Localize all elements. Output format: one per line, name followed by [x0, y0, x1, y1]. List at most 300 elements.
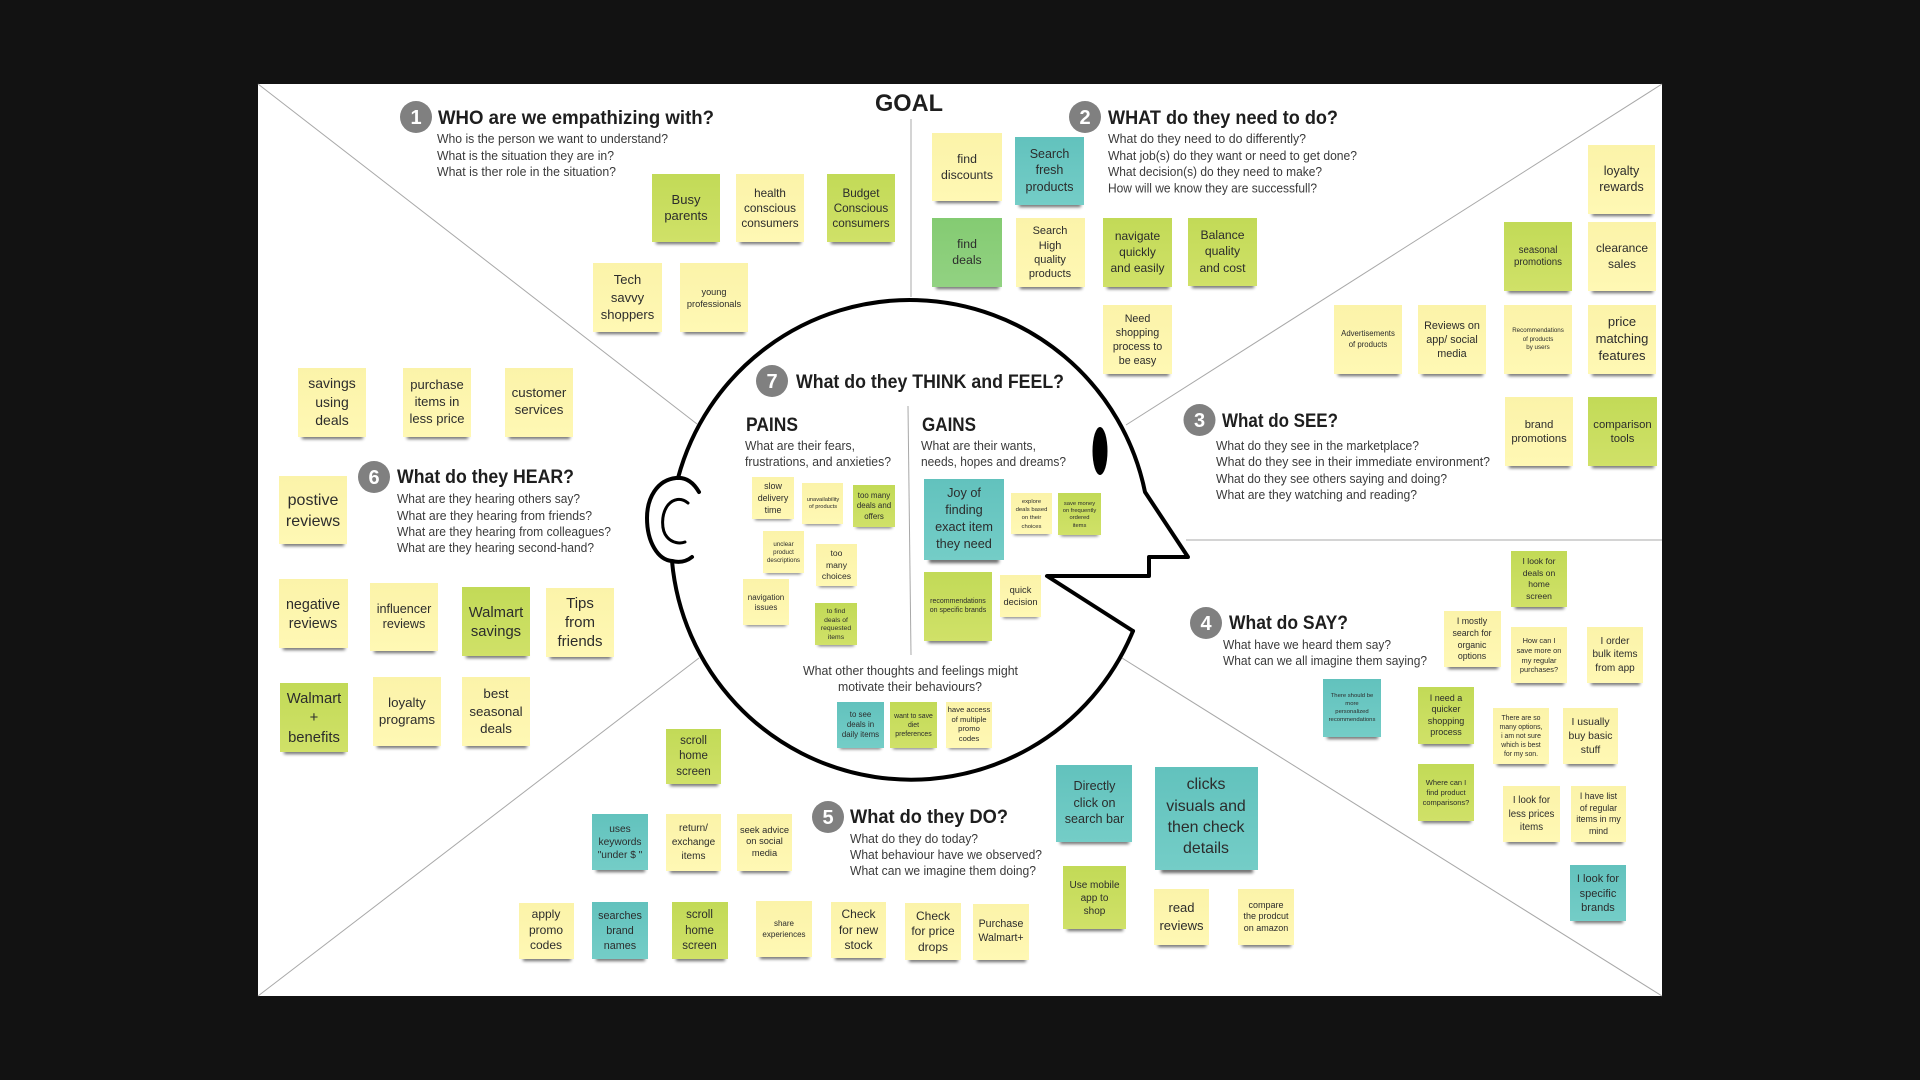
sticky: loyalty rewards	[1588, 145, 1655, 216]
sticky: Walmart + benefits	[280, 683, 348, 754]
sticky: to find deals of requested items: items	[828, 634, 845, 641]
sticky: clicks visuals and then check details	[1155, 767, 1258, 873]
sticky: I have list of regular items in my mind: I have list	[1580, 791, 1618, 801]
questions: pains: frustrations, and anxieties?	[745, 455, 891, 469]
sticky: Budget Conscious consumers: Conscious	[834, 202, 888, 215]
questions 4: What can we all imagine them saying?	[1223, 654, 1427, 668]
sticky: Joy of finding exact item they need: exact item	[935, 520, 993, 534]
sticky: recommendations on specific brands	[924, 572, 992, 643]
sticky: Reviews on app/ social media: app/ social	[1426, 334, 1478, 346]
sticky: compare the prodcut on amazon: the prodcut	[1243, 911, 1289, 921]
sticky: Purchase Walmart+: Purchase	[979, 918, 1023, 930]
sticky: Where can I find product comparisons?	[1418, 764, 1474, 823]
questions 2: What do they need to do differently?	[1108, 132, 1306, 146]
sticky: save money on frequently ordered items: items	[1073, 523, 1087, 529]
sticky: scroll home screen (bottom): screen	[682, 940, 717, 952]
sticky: young professionals: professionals	[687, 299, 741, 309]
sticky: influencer reviews	[370, 583, 438, 653]
sticky: Need shopping process to be easy: Need	[1125, 313, 1150, 325]
sticky: Where can I find product comparisons?: Where can I	[1426, 778, 1466, 787]
sticky: Walmart savings: savings	[471, 624, 521, 640]
sticky: find deals: deals	[952, 253, 982, 267]
sticky: I order bulk items from app: bulk items	[1592, 649, 1638, 660]
sticky: uses keywords under $	[592, 814, 648, 872]
sticky: clicks visuals and then check details: details	[1183, 840, 1229, 857]
sticky: navigation issues: navigation	[748, 593, 784, 602]
sticky: seek advice on social media: media	[752, 848, 778, 858]
sticky: share experiences: share	[774, 919, 795, 928]
head outline	[647, 300, 1188, 780]
sticky: to see deals in daily items: to see	[850, 710, 872, 719]
sticky: explore deals based on their choices: on their	[1022, 515, 1041, 521]
sticky: I have list of regular items in my mind: of regular	[1580, 803, 1617, 813]
sticky: I have list of regular items in my mind	[1571, 786, 1626, 844]
questions 2	[1108, 132, 1357, 196]
sticky: I order bulk items from app	[1587, 627, 1643, 685]
sticky: I need a quicker shopping process: I need a	[1430, 693, 1462, 703]
sticky: Advertisements of products: Advertisements	[1341, 329, 1395, 338]
sticky: Search fresh products: Search	[1030, 147, 1069, 161]
sticky: have access of multiple promo codes: codes	[959, 734, 979, 743]
sticky: Recommendations of products by users: Recommendations	[1512, 327, 1564, 334]
sticky: slow delivery time: time	[765, 505, 781, 515]
sticky: seasonal promotions	[1504, 222, 1572, 293]
sticky: Check for new stock: stock	[844, 938, 874, 952]
sticky: Busy parents: parents	[664, 208, 708, 223]
sticky: to find deals of requested items: requested	[821, 625, 851, 632]
sticky: There should be more personalized recommendations: recommendations	[1329, 717, 1375, 723]
sticky: searches brand names: searches	[598, 910, 643, 922]
sticky: How can I save more: purchases?	[1520, 665, 1558, 674]
section 2: WHAT	[932, 101, 1357, 376]
sticky: navigate quickly and easily: navigate	[1115, 229, 1161, 243]
questions 5: What behaviour have we observed?	[850, 848, 1042, 862]
sticky: apply promo codes: promo	[529, 923, 563, 937]
sticky: I usually buy basic stuff: stuff	[1581, 745, 1600, 756]
sticky: Recommendations of products by users	[1504, 305, 1572, 376]
sticky: navigate quickly and easily: quickly	[1119, 245, 1156, 259]
sticky: Advertisements of products	[1334, 305, 1402, 376]
sticky: clicks visuals and then check details: visuals and	[1166, 798, 1246, 815]
questions: gains	[921, 439, 1066, 469]
sticky: too many choices	[816, 544, 857, 587]
sticky: loyalty programs: loyalty	[388, 695, 426, 710]
heading: GOAL: GOAL	[875, 90, 943, 117]
sticky: find discounts: find	[957, 152, 977, 166]
sticky: savings using deals: deals	[315, 412, 349, 428]
sticky: health conscious consumers: consumers	[741, 217, 799, 230]
sticky: scroll home screen (top): scroll	[680, 735, 707, 747]
sticky: apply promo codes: apply	[532, 907, 560, 921]
sticky: There should be more personalized recommendations: There should be	[1331, 693, 1374, 699]
sticky: find discounts: discounts	[941, 168, 993, 182]
sticky: I look for deals on home screen: I look for	[1523, 556, 1556, 566]
sticky: find deals	[932, 218, 1002, 289]
sticky: There are so many options: for my son.	[1504, 751, 1538, 758]
sticky: How can I save more: How can I	[1523, 636, 1555, 645]
number badge 5	[812, 801, 844, 833]
sticky: unavailability of products	[802, 483, 843, 525]
sticky: slow delivery time: slow	[764, 481, 782, 491]
questions 2: What job(s) do they want or need to get done?	[1108, 149, 1357, 163]
sticky: clicks visuals and then check details: clicks	[1187, 776, 1225, 793]
sticky: I look for specific brands: specific	[1580, 888, 1617, 900]
section 6: HEAR	[279, 368, 614, 754]
sticky: Balance quality and cost: and cost	[1199, 261, 1246, 275]
number badge 5: 5	[822, 807, 834, 829]
sticky: share experiences	[756, 901, 812, 959]
sticky: Tech savvy shoppers: Tech	[614, 272, 641, 287]
sticky: unclear product descriptions	[763, 531, 804, 574]
sticky: customer services: services	[515, 402, 564, 417]
sticky: influencer reviews: influencer	[377, 602, 431, 616]
sticky: Tech savvy shoppers: shoppers	[601, 307, 655, 322]
sticky: Need shopping process to be easy: process to	[1113, 341, 1162, 353]
sticky: Purchase Walmart+: Walmart+	[978, 932, 1024, 944]
sticky: Tips from friends: from	[565, 614, 595, 631]
number badge 1: 1	[410, 107, 422, 129]
sticky: Tech savvy shoppers	[593, 263, 662, 334]
sticky: brand promotions: brand	[1525, 419, 1553, 431]
sticky: I usually buy basic stuff	[1563, 708, 1618, 766]
sticky: I look for deals on home screen: home	[1528, 579, 1550, 589]
sticky: I usually buy basic stuff: I usually	[1571, 717, 1610, 728]
sticky: scroll home screen (top)	[666, 729, 721, 786]
sticky: savings using deals: using	[315, 394, 349, 410]
icon: eye	[1092, 427, 1108, 475]
sticky: scroll home screen (bottom): home	[685, 925, 714, 937]
sticky: clearance sales: sales	[1608, 257, 1636, 271]
sticky: save money on frequently ordered items: on frequently	[1063, 508, 1096, 514]
sticky: return/exchange items: exchange	[672, 837, 716, 848]
questions 3: What are they watching and reading?	[1216, 488, 1417, 502]
section 4: SAY	[1190, 551, 1643, 923]
sticky: Walmart + benefits: +	[310, 710, 318, 726]
sticky: savings using deals	[298, 368, 366, 439]
sticky: navigate quickly and easily: and easily	[1110, 261, 1165, 275]
sticky: searches brand names: brand	[606, 925, 634, 937]
questions: pains	[745, 439, 891, 469]
sticky: save money on frequently ordered items	[1058, 493, 1101, 536]
sticky: Balance quality and cost	[1188, 218, 1257, 288]
sticky: There should be more personalized recommendations	[1323, 679, 1381, 739]
sticky: Tips from friends: Tips	[566, 595, 594, 612]
sticky: negative reviews	[279, 579, 348, 650]
sticky: health conscious consumers: health	[754, 187, 786, 200]
sticky: slow delivery time: delivery	[758, 493, 789, 503]
sticky: too many choices: many	[826, 560, 848, 570]
sticky: purchase items in less price: less price	[410, 411, 464, 426]
sticky: Tech savvy shoppers: savvy	[611, 290, 645, 305]
sticky: brand promotions: promotions	[1511, 433, 1567, 445]
questions: gains: needs, hopes and dreams?	[921, 455, 1066, 469]
sticky: I mostly search for organic options: I mostly	[1457, 616, 1488, 626]
sticky: best seasonal deals: seasonal	[469, 704, 523, 719]
sticky: purchase items in less price: purchase	[410, 377, 464, 392]
sticky: Check for new stock: Check	[841, 907, 877, 921]
sticky: I look for less prices items: less prices	[1509, 809, 1555, 820]
sticky: seek advice on social media: seek advice	[740, 825, 789, 835]
sticky: brand promotions	[1505, 397, 1573, 468]
questions 1	[437, 132, 668, 179]
sticky: quick decision: decision	[1003, 597, 1038, 607]
sticky: to see deals in daily items: daily items	[842, 730, 879, 739]
sticky: Balance quality and cost: Balance	[1200, 228, 1245, 242]
questions: other thoughts: motivate their behaviours?	[838, 680, 982, 694]
questions 3: What do they see in the marketplace?	[1216, 439, 1419, 453]
sticky: Reviews on app/ social media	[1418, 305, 1486, 376]
sticky: to find deals of requested items: to find	[827, 608, 845, 615]
questions 6: What are they hearing from colleagues?	[397, 525, 611, 539]
sticky: Balance quality and cost: quality	[1205, 244, 1241, 258]
sticky: Need shopping process to be easy: be easy	[1119, 355, 1157, 367]
sticky: recommendations on specific brands: on specific brands	[930, 607, 987, 614]
section 7: THINK and FEEL	[743, 365, 1101, 749]
sticky: compare the prodcut on amazon	[1238, 889, 1294, 947]
sticky: want to save diet preferences	[890, 702, 937, 749]
sticky: to find deals of requested items: deals of	[824, 617, 848, 624]
sticky: Budget Conscious consumers	[827, 174, 895, 244]
sticky: I look for deals on home screen: screen	[1526, 591, 1552, 601]
sticky: price matching features: matching	[1596, 331, 1648, 346]
sticky: purchase items in less price	[403, 368, 471, 439]
number badge 3	[1184, 404, 1216, 436]
sticky: health conscious consumers	[736, 174, 804, 244]
sticky: too many deals and offers: offers	[864, 512, 884, 521]
sticky: I need a quicker shopping process	[1418, 687, 1474, 746]
number badge 2: 2	[1079, 107, 1091, 129]
heading 4: What do SAY?	[1229, 613, 1348, 634]
sticky: clearance sales	[1588, 222, 1656, 293]
sticky: have access of multiple promo codes	[946, 702, 992, 749]
sticky: unclear product descriptions: descriptions	[767, 557, 800, 564]
sticky: apply promo codes: codes	[530, 938, 562, 952]
sticky: I mostly search for organic options: organic	[1458, 640, 1487, 650]
sticky: seasonal promotions: seasonal	[1519, 245, 1557, 256]
sticky: How can I save more: my regular	[1522, 656, 1557, 665]
sticky: compare the prodcut on amazon: compare	[1248, 900, 1284, 910]
sticky: have access of multiple promo codes: have access	[948, 705, 991, 714]
sticky: unavailability of products: unavailability	[807, 497, 839, 503]
sticky: Search fresh products: fresh	[1036, 163, 1063, 177]
sticky: Search fresh products	[1015, 137, 1084, 207]
sticky: Tips from friends: friends	[557, 633, 603, 650]
number badge 4: 4	[1200, 613, 1212, 635]
sticky: navigation issues: issues	[755, 603, 777, 612]
sticky: Directly click on search bar	[1056, 765, 1132, 844]
sticky: I need a quicker shopping process: process	[1430, 727, 1462, 737]
number badge 7	[756, 365, 788, 397]
sticky: too many deals and offers: too many	[858, 491, 890, 500]
questions: pains: What are their fears,	[745, 439, 855, 453]
sticky: Use mobile app to shop	[1063, 866, 1126, 931]
questions 6: What are they hearing second-hand?	[397, 541, 594, 555]
questions 6: What are they hearing from friends?	[397, 509, 592, 523]
sticky: I mostly search for organic options: search for	[1452, 628, 1492, 638]
sticky: Reviews on app/ social media: media	[1437, 348, 1467, 360]
sticky: want to save diet preferences: diet	[908, 722, 919, 729]
number badge 3: 3	[1194, 410, 1205, 432]
questions 4	[1223, 638, 1427, 668]
sticky: explore deals based on their choices	[1011, 493, 1052, 535]
sticky: influencer reviews: reviews	[383, 617, 425, 631]
sticky: scroll home screen (bottom): scroll	[686, 909, 713, 921]
sticky: Search High quality products: quality	[1034, 254, 1066, 266]
sticky: seek advice on social media: on social	[746, 836, 783, 846]
sticky: have access of multiple promo codes: of multiple	[951, 715, 987, 724]
heading: GAINS: GAINS	[922, 415, 976, 436]
sticky: Joy of finding exact item they need: finding	[945, 503, 983, 517]
sticky: too many choices: choices	[822, 571, 851, 581]
sticky: Search fresh products: products	[1026, 180, 1073, 194]
questions 5: What do they do today?	[850, 832, 978, 846]
sticky: comparison tools	[1588, 397, 1657, 468]
sticky: I have list of regular items in my mind: items in my	[1576, 814, 1621, 824]
sticky: compare the prodcut on amazon: on amazon	[1244, 923, 1288, 933]
sticky: There are so many options: many options,	[1500, 724, 1543, 731]
sticky: customer services: customer	[512, 385, 567, 400]
sticky: Use mobile app to shop: shop	[1084, 906, 1106, 917]
sticky: price matching features	[1588, 305, 1656, 376]
sticky: Use mobile app to shop: app to	[1081, 893, 1109, 904]
sticky: to see deals in daily items: deals in	[847, 720, 874, 729]
sticky: How can I save more: save more on	[1517, 646, 1561, 655]
sticky: Check for price drops	[905, 903, 961, 962]
sticky: Check for price drops: drops	[918, 940, 948, 954]
sticky: Joy of finding exact item they need: they need	[936, 537, 992, 551]
sticky: I mostly search for organic options	[1444, 611, 1501, 669]
sticky: postive reviews: reviews	[286, 513, 340, 530]
sticky: return/exchange items: return/	[679, 823, 708, 834]
sticky: Budget Conscious consumers: consumers	[832, 217, 890, 230]
sticky: quick decision: quick	[1010, 585, 1032, 595]
panel: white canvas	[258, 84, 1662, 996]
sticky: young professionals: young	[701, 287, 727, 297]
sticky: Search High quality products: products	[1029, 268, 1072, 280]
sticky: negative reviews: negative	[286, 597, 340, 613]
sticky: unclear product descriptions: unclear	[773, 541, 794, 548]
sticky: Recommendations of products by users: by users	[1526, 344, 1550, 351]
sticky: price matching features: features	[1599, 348, 1646, 363]
sticky: I look for specific brands: brands	[1581, 902, 1615, 914]
heading 7: What do they THINK and FEEL?	[796, 372, 1064, 393]
sticky: I look for specific brands	[1570, 865, 1626, 923]
sticky: to see deals in daily items	[837, 702, 884, 749]
sticky: best seasonal deals: deals	[480, 721, 512, 736]
sticky: read reviews: reviews	[1159, 918, 1204, 933]
sticky: seek advice on social media	[737, 814, 792, 873]
sticky: Search High quality products: Search	[1033, 225, 1067, 237]
sticky: Directly click on search bar: Directly	[1074, 779, 1116, 793]
sticky: slow delivery time	[752, 477, 794, 520]
sticky: save money on frequently ordered items: save money	[1064, 501, 1095, 507]
sticky: too many deals and offers	[853, 485, 895, 528]
sticky: Walmart + benefits: Walmart	[287, 691, 341, 707]
sticky: Budget Conscious consumers: Budget	[842, 187, 880, 200]
heading 3: What do SEE?	[1222, 411, 1338, 432]
sticky: explore deals based on their choices: choices	[1022, 524, 1042, 530]
sticky: uses keywords under $: "under $ "	[598, 850, 643, 861]
sticky: unclear product descriptions: product	[773, 549, 794, 556]
sticky: find discounts	[932, 133, 1002, 203]
sticky: Reviews on app/ social media: Reviews on	[1424, 320, 1480, 332]
sticky: Search High quality products: High	[1039, 240, 1061, 252]
questions: other thoughts	[803, 664, 1019, 694]
sticky: read reviews	[1154, 889, 1209, 947]
sticky: savings using deals: savings	[308, 375, 356, 391]
sticky: Purchase Walmart+	[973, 904, 1029, 962]
sticky: uses keywords under $: keywords	[598, 837, 642, 848]
sticky: I order bulk items from app: from app	[1595, 663, 1635, 674]
sticky: unavailability of products: of products	[809, 504, 837, 510]
questions 1: What is ther role in the situation?	[437, 165, 616, 179]
heading 2: WHAT do they need to do?	[1108, 108, 1338, 129]
sticky: Walmart savings	[462, 587, 530, 658]
sticky: to find deals of requested items	[815, 603, 857, 646]
sticky: postive reviews	[279, 476, 347, 546]
questions 3	[1216, 439, 1490, 502]
sticky: I mostly search for organic options: options	[1458, 651, 1487, 661]
section 1: WHO	[400, 101, 895, 334]
sticky: I need a quicker shopping process: quicker	[1431, 704, 1461, 714]
sticky: I look for deals on home screen	[1511, 551, 1567, 609]
sticky: seasonal promotions: promotions	[1514, 257, 1562, 268]
sticky: I usually buy basic stuff: buy basic	[1569, 731, 1612, 742]
sticky: recommendations on specific brands: recommendations	[930, 598, 986, 605]
sticky: I look for less prices items	[1503, 786, 1560, 844]
sticky: There are so many options	[1493, 708, 1549, 766]
sticky: Directly click on search bar: click on	[1074, 796, 1116, 810]
sticky: Joy of finding exact item they need: Joy of	[947, 486, 981, 500]
questions 3: What do they see in their immediate environment?	[1216, 455, 1490, 469]
sticky: have access of multiple promo codes: promo	[958, 724, 980, 733]
number badge 6: 6	[368, 467, 380, 489]
heading 5: What do they DO?	[850, 807, 1008, 828]
sticky: Joy of finding exact item they need	[924, 479, 1004, 563]
sticky: comparison tools: tools	[1611, 433, 1635, 445]
sticky: share experiences: experiences	[762, 930, 806, 939]
sticky: loyalty programs	[373, 677, 441, 748]
sticky: explore deals based on their choices: explore	[1022, 499, 1042, 505]
sticky: I look for deals on home screen: deals on	[1523, 568, 1555, 578]
sticky: return/exchange items: items	[682, 851, 705, 862]
sticky: explore deals based on their choices: deals based	[1016, 507, 1047, 513]
questions 1: Who is the person we want to understand?	[437, 132, 668, 146]
sticky: Need shopping process to be easy	[1103, 305, 1172, 376]
number badge 1	[400, 101, 432, 133]
sticky: best seasonal deals	[462, 677, 530, 748]
sticky: There are so many options: which is best	[1500, 742, 1541, 749]
questions 4: What have we heard them say?	[1223, 638, 1391, 652]
sticky: return/exchange items	[666, 814, 721, 873]
sticky: scroll home screen (bottom)	[672, 902, 728, 961]
questions 1: What is the situation they are in?	[437, 149, 614, 163]
sticky: scroll home screen (top): home	[679, 750, 708, 762]
sticky: There should be more personalized recommendations: more	[1345, 701, 1359, 707]
heading 6: What do they HEAR?	[397, 467, 574, 488]
sticky: I have list of regular items in my mind: mind	[1589, 826, 1608, 836]
questions 2: What decision(s) do they need to make?	[1108, 165, 1322, 179]
sticky: Directly click on search bar: search bar	[1065, 812, 1124, 826]
sticky: young professionals	[680, 263, 748, 334]
sticky: navigation issues	[743, 579, 789, 626]
sticky: How can I save more	[1511, 627, 1567, 685]
sticky: Busy parents: Busy	[672, 192, 701, 207]
sticky: too many choices: too	[831, 548, 843, 558]
sticky: loyalty programs: programs	[379, 712, 435, 727]
sticky: There are so many options: There are so	[1501, 715, 1541, 722]
sticky: Walmart savings: Walmart	[469, 605, 523, 621]
